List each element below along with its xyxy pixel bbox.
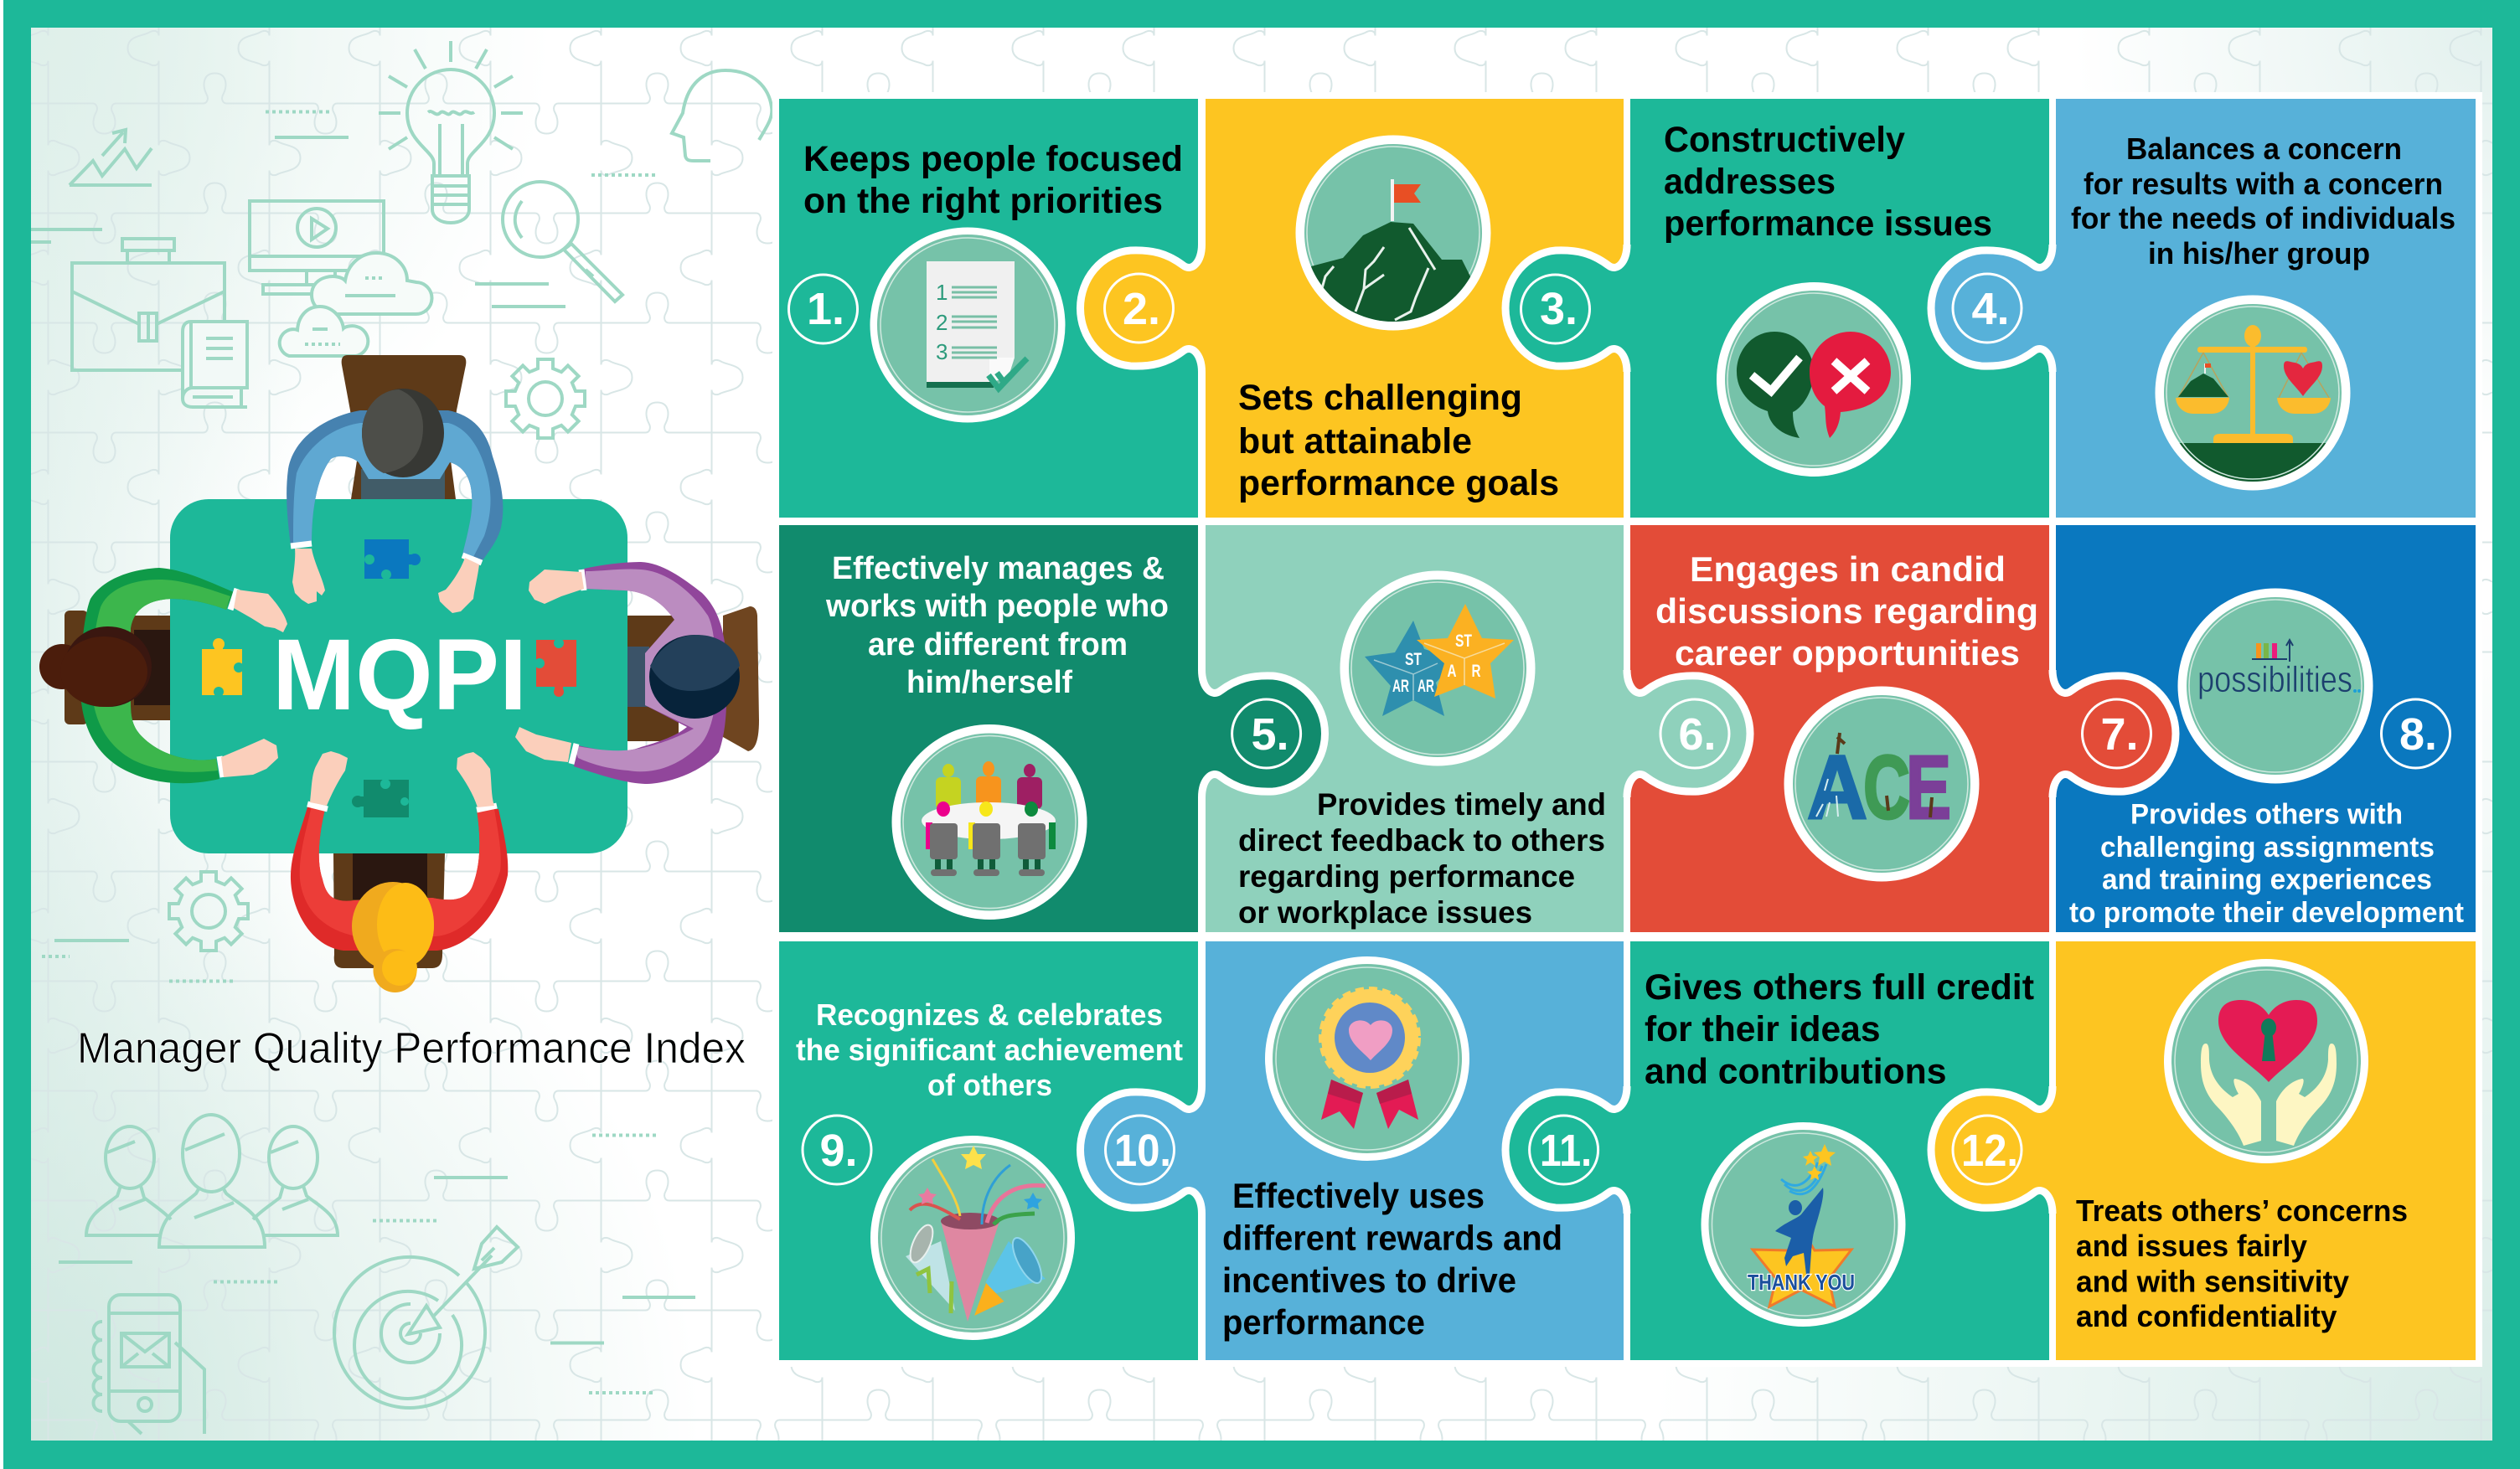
icon: stars: [1340, 571, 1535, 765]
badge 12: 12.: [1961, 1126, 2018, 1176]
person: top, blue shirt: [287, 389, 503, 613]
panel 6 text: Provides timely and: [1317, 787, 1606, 822]
panel 4 text: [2071, 131, 2455, 271]
badge 2: [1104, 274, 1173, 343]
icon: party poppers: [870, 1136, 1075, 1340]
badge 9: 9.: [819, 1126, 858, 1176]
icon: thank you star: THANK YOU: [1748, 1270, 1855, 1295]
panel 4 text: Balances a concern: [2126, 131, 2402, 166]
logo text MQPI: MQPI: [272, 617, 527, 731]
icon: ACE letters: A: [1807, 736, 1867, 838]
icon: briefcase: [72, 239, 225, 370]
icon: checklist: 3: [936, 339, 948, 364]
icon: target with arrow: [334, 1227, 518, 1408]
chair: left person: [65, 611, 172, 724]
icon: stars: ST: [1405, 650, 1422, 669]
icon: mountain with flag: [1295, 136, 1491, 335]
panel 5 text: works with people who: [825, 589, 1169, 624]
icon: head profile: [672, 70, 772, 161]
icon: stars: R: [1471, 662, 1481, 681]
torso slate: top person: [361, 469, 445, 503]
panel 11 text: for their ideas: [1645, 1009, 1880, 1049]
panel 8 text: Provides others with: [2130, 799, 2403, 831]
panel 10 text: performance: [1222, 1302, 1425, 1342]
panel 4 text: in his/her group: [2148, 236, 2370, 271]
tab 7: [2048, 670, 2176, 797]
icon: diverse group at table: [891, 724, 1087, 920]
badge 5: [1232, 699, 1301, 768]
panel 3 text: [1664, 120, 1992, 244]
panel 1 text: Keeps people focused: [803, 139, 1183, 179]
panel 10 text: different rewards and: [1222, 1218, 1562, 1258]
white panel backing: [772, 92, 2482, 1367]
panel 3 text: performance issues: [1664, 204, 1992, 244]
icon: rising chart: [70, 130, 152, 185]
puzzle piece: red: [534, 638, 576, 697]
panel 12 text: and with sensitivity: [2076, 1265, 2349, 1298]
panel 11 text: and contributions: [1645, 1052, 1947, 1092]
panel 5: diversity: [779, 525, 1325, 932]
icon: ACE letters: [1784, 687, 1979, 881]
panel 6 text: direct feedback to others: [1238, 823, 1605, 858]
icon: rosette with heart: [1265, 956, 1469, 1161]
panel 8 text: [2069, 799, 2464, 929]
icon: possibilities: possibilities: [2197, 659, 2352, 700]
panel 3 text: addresses: [1664, 162, 1836, 202]
panel 9 text: of others: [927, 1068, 1052, 1102]
tab 11: [1505, 1086, 1632, 1214]
icon: ACE letters: C: [1863, 736, 1910, 838]
icon: stars: ST: [1455, 631, 1472, 651]
panel 6 text: regarding performance: [1238, 859, 1575, 894]
line art icons: [70, 41, 772, 1434]
person: bottom, red shirt: [291, 751, 508, 992]
tab 5: [1196, 670, 1325, 797]
icon: heart in hands: [2164, 959, 2368, 1163]
panel 11 text: [1645, 967, 2034, 1092]
panel 9: recognition: [779, 941, 1198, 1360]
badge 11: 11.: [1540, 1126, 1592, 1176]
badge 4: 4.: [1971, 284, 2010, 334]
badge 3: [1521, 275, 1590, 343]
panel 9 text: the significant achievement: [796, 1033, 1183, 1067]
panel 7 text: [1655, 549, 2038, 673]
icon: thank you star: [1701, 1122, 1905, 1327]
icon: phone with mail: [94, 1295, 204, 1434]
panel 9 text: [796, 997, 1183, 1102]
icon: large cloud: [312, 253, 431, 314]
icon: gear lower: [169, 872, 248, 951]
panel 5 text: Effectively manages &: [832, 551, 1164, 586]
icon: checklist: 1: [936, 280, 948, 305]
panel 10: rewards: [1081, 941, 1624, 1360]
panel 1 text: on the right priorities: [803, 181, 1163, 221]
chair: right person: [624, 606, 759, 751]
chair: bottom person: [333, 853, 445, 968]
badge 1: [789, 275, 858, 343]
panel 8 text: and training experiences: [2102, 864, 2432, 896]
subtitle: Manager Quality Performance Index: [77, 1024, 746, 1073]
panel 11: credit: [1505, 941, 2049, 1360]
icon: scales: [2155, 295, 2351, 493]
panel 2 text: performance goals: [1238, 463, 1559, 503]
badge 6: 6.: [1678, 709, 1717, 760]
tab 6: [1622, 670, 1750, 797]
badge 11: [1530, 1116, 1598, 1184]
tab 4: [1931, 245, 2058, 372]
panel 10 text: incentives to drive: [1222, 1260, 1516, 1300]
icon: checklist: 2: [936, 310, 948, 335]
panel 2 text: Sets challenging: [1238, 378, 1522, 418]
puzzle piece: yellow: [202, 638, 244, 697]
puzzle piece: dark green: [352, 779, 409, 817]
panel 7 text: career opportunities: [1675, 633, 2020, 673]
panel 2: goals: [1081, 99, 1624, 518]
badge 6: [1660, 699, 1729, 768]
icon: possibilities: [2178, 588, 2373, 784]
panel 9 text: Recognizes & celebrates: [816, 997, 1163, 1032]
panel 7 text: Engages in candid: [1690, 549, 2006, 589]
panel 7: career discussions: [1630, 525, 2176, 932]
panel 3 text: Constructively: [1664, 120, 1905, 160]
panel 12: fairness: [1931, 941, 2476, 1360]
badge 3: 3.: [1540, 284, 1578, 334]
panel 8 text: to promote their development: [2069, 897, 2464, 929]
icon: small cloud: [280, 307, 368, 356]
badge 7: 7.: [2100, 709, 2139, 760]
panel 12 text: and issues fairly: [2076, 1229, 2307, 1263]
decorative dashes and rules: [31, 112, 695, 1393]
badge 12: [1953, 1116, 2022, 1184]
icon: light bulb: [379, 41, 523, 223]
badge 8: 8.: [2399, 709, 2437, 760]
badge 4: [1953, 274, 2022, 343]
badge 10: 10.: [1114, 1126, 1171, 1176]
icon: checklist: [870, 228, 1066, 422]
panel 12 text: [2076, 1193, 2408, 1333]
badge 10: [1106, 1116, 1175, 1184]
panel 6: timely feedback: [1206, 525, 1750, 932]
icon: monitor with play button: [250, 201, 384, 294]
chair: top person: [342, 355, 466, 499]
panel 6 text: or workplace issues: [1238, 895, 1532, 930]
panel 12 text: Treats others’ concerns: [2076, 1193, 2408, 1228]
panel 8: assignments and training: [2056, 525, 2476, 932]
panel 3: performance issues: [1505, 99, 2049, 518]
panel 11 text: Gives others full credit: [1645, 967, 2034, 1008]
panel 4 text: for results with a concern: [2084, 167, 2443, 201]
puzzle piece: blue: [364, 539, 421, 580]
badge 8: [2381, 699, 2450, 768]
panel 4 text: for the needs of individuals: [2071, 201, 2455, 235]
panel 7 text: discussions regarding: [1655, 591, 2038, 631]
tab 12: [1931, 1086, 2058, 1214]
panel 1 text: [803, 139, 1183, 221]
icon: stars: AR: [1392, 677, 1409, 696]
person: right, purple shirt: [515, 562, 740, 784]
table: [170, 499, 627, 853]
badge 5: 5.: [1251, 709, 1289, 760]
panel 5 text: him/herself: [906, 665, 1072, 700]
panel 1: priorities: [779, 99, 1198, 518]
panel 10 text: Effectively uses: [1232, 1176, 1485, 1215]
panel 5 text: are different from: [868, 627, 1128, 662]
badge 1: 1.: [807, 284, 844, 334]
badge 9: [803, 1116, 871, 1184]
panel 6 text: [1238, 787, 1606, 930]
icon: stars: A: [1448, 662, 1456, 681]
icon: magnifying glass: [503, 182, 622, 302]
panel 5 text: [825, 551, 1169, 700]
icon: stars: AR: [1418, 677, 1434, 696]
icon: check and cross speech bubbles: [1717, 282, 1911, 477]
panel 10 text: [1222, 1176, 1562, 1342]
icon: gear upper: [506, 359, 585, 438]
badge 7: [2083, 699, 2151, 768]
panel 12 text: and confidentiality: [2076, 1299, 2337, 1333]
tab 3: [1505, 245, 1632, 372]
tab 2: [1081, 245, 1206, 372]
badge 2: 2.: [1123, 284, 1160, 334]
panel 2 text: but attainable: [1238, 421, 1472, 461]
meeting table illustration: [39, 355, 759, 992]
tab 10: [1081, 1086, 1206, 1214]
person: left, green shirt: [39, 568, 287, 783]
icon: book: [183, 322, 247, 407]
panel 4: balance: [1931, 99, 2476, 518]
panel 2 text: [1238, 378, 1559, 503]
icon: ACE letters: E: [1906, 736, 1951, 838]
panel 8 text: challenging assignments: [2100, 832, 2435, 863]
icon: three people: [86, 1115, 338, 1247]
